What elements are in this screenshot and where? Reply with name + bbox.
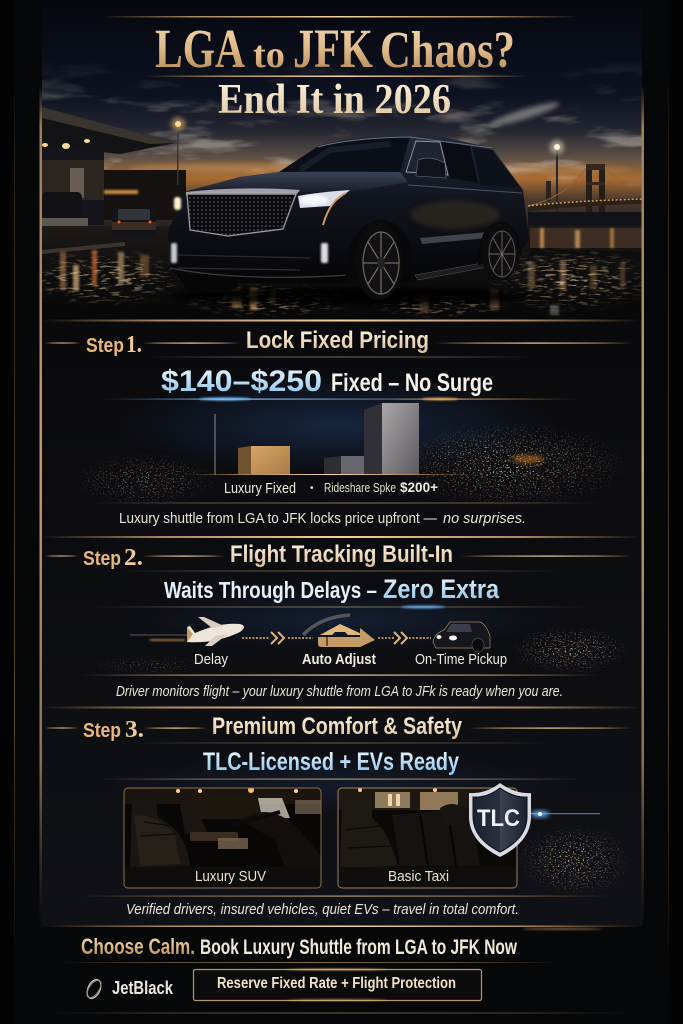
photo: basic taxi interior: [338, 788, 517, 888]
background SUV: [112, 207, 156, 232]
step 1 heading: Lock Fixed Pricing: [246, 327, 429, 354]
street lamps: [171, 117, 564, 226]
step 2 heading: Step: [83, 548, 121, 570]
cta headline: [60, 934, 560, 963]
process labels: Auto Adjust: [302, 651, 376, 668]
licensed headline: TLC-Licensed + EVs Ready: [203, 748, 459, 776]
bar chart: [190, 403, 470, 475]
button: [194, 968, 482, 1001]
icon: small suv: [433, 622, 490, 652]
step 2 heading: 2.: [124, 545, 143, 571]
process labels: Delay: [194, 651, 228, 668]
step 1 heading: Step: [86, 335, 124, 357]
price headline: $140–$250: [161, 365, 322, 398]
bridge: [528, 164, 642, 226]
title: LGA: [155, 18, 245, 79]
wet road: [42, 226, 642, 276]
step 2 heading: [45, 541, 633, 572]
step 1 heading: 1.: [126, 332, 142, 358]
title: Chaos?: [380, 22, 515, 79]
bar chart background speckle: [74, 422, 626, 507]
wheels: [184, 230, 519, 300]
photo: basic taxi interior: Basic Taxi: [388, 868, 449, 885]
chart labels: Luxury Fixed: [224, 480, 296, 497]
title: to: [253, 34, 285, 76]
chart labels: [224, 479, 438, 497]
icon: TLC shield: [469, 783, 600, 857]
title: [100, 16, 580, 123]
cta headline: Choose Calm.: [81, 934, 195, 959]
photo: luxury suv interior: Luxury SUV: [195, 868, 266, 885]
panel: step 3 premium comfort: [45, 713, 642, 918]
chart labels: •: [310, 483, 314, 494]
terminal building: [42, 107, 186, 226]
process labels: [194, 651, 507, 668]
icon: auto adjust: [303, 615, 375, 647]
step 1 caption: no surprises.: [443, 510, 526, 527]
title: End It in 2026: [218, 77, 451, 123]
panel: call to action: [60, 934, 560, 1001]
step 3 heading: Premium Comfort & Safety: [212, 713, 463, 740]
hero photo: SUV on wet road at dusk: [42, 0, 642, 320]
button: Reserve Fixed Rate + Flight Protection: [217, 975, 456, 992]
price headline: Fixed – No Surge: [331, 369, 493, 397]
process labels: On-Time Pickup: [415, 651, 507, 668]
chart labels: $200+: [400, 479, 438, 495]
arrow: delay to adjust: [242, 632, 313, 644]
step 2 heading: Flight Tracking Built-In: [230, 541, 453, 568]
arrow: adjust to pickup: [378, 632, 431, 644]
step 1 heading: [45, 327, 633, 358]
main SUV: [168, 134, 530, 305]
step 3 caption: Verified drivers, insured vehicles, quiet EVs – travel in total comfort.: [126, 901, 519, 918]
step 3 heading: [45, 713, 633, 744]
panel: step 2 flight tracking: [42, 541, 642, 700]
icon: JetBlack logo: JetBlack: [112, 978, 174, 998]
delays headline: Zero Extra: [383, 574, 500, 604]
icon: plane: [130, 617, 244, 646]
step 3 heading: 3.: [125, 717, 144, 743]
panel: step 1 lock fixed pricing: [42, 327, 642, 527]
step 2 caption: Driver monitors flight – your luxury shuttle from LGA to JFk is ready when you are.: [116, 683, 563, 700]
road reflections: [60, 228, 625, 315]
icon: TLC shield: TLC: [477, 805, 520, 832]
delays headline: [90, 574, 590, 608]
cta headline: Book Luxury Shuttle from LGA to JFK Now: [200, 936, 517, 959]
photo: luxury suv interior: [124, 787, 321, 888]
icon: JetBlack logo: [84, 977, 174, 1001]
title: JFK: [293, 18, 373, 79]
chart labels: Rideshare Spke: [324, 480, 396, 495]
step 3 heading: Step: [83, 720, 121, 742]
price headline: [100, 365, 580, 400]
delays headline: Waits Through Delays –: [164, 577, 377, 603]
step 1 caption: Luxury shuttle from LGA to JFK locks price upfront —: [119, 510, 437, 527]
